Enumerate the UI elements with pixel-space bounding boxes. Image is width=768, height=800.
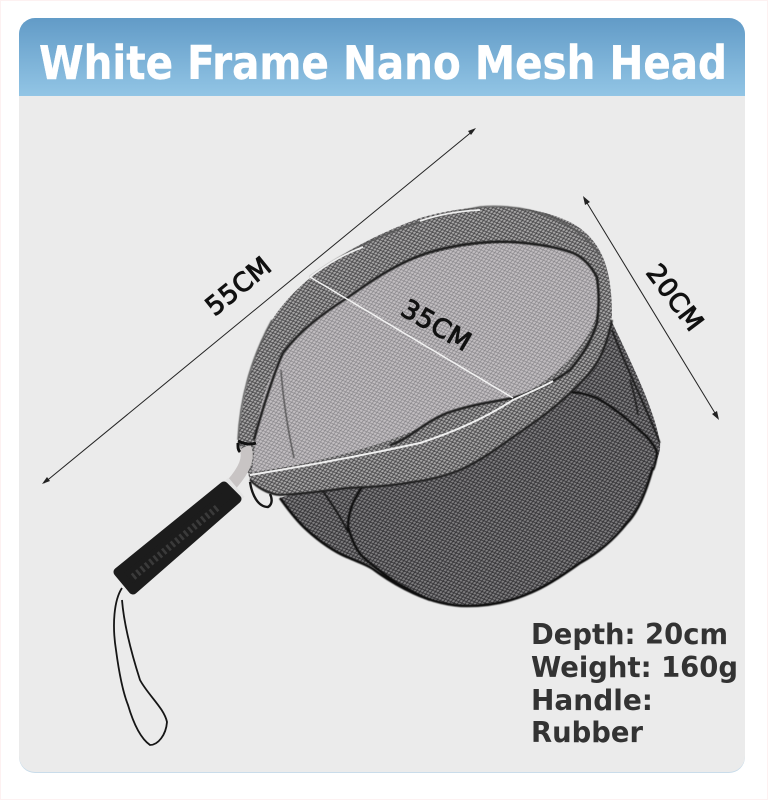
illustration: landing net [114,206,660,745]
label: 20cm: 20CM [640,259,709,338]
header band [19,18,745,96]
neck [232,447,247,484]
bag seams [280,330,660,606]
loop clip [250,482,272,507]
inner hoop opening [252,243,598,472]
specs text [531,617,738,749]
white frame highlights [250,381,553,475]
lanyard [114,588,167,745]
specs text: Handle: [531,683,653,717]
handle ring [227,479,243,498]
specs text: Rubber [531,715,644,749]
arrow: 55cm length [42,128,476,484]
rim band [238,207,612,495]
specs text: Depth: 20cm [531,617,728,651]
white 35cm line [310,277,513,398]
handle ribs [133,507,218,577]
arrow: 20cm depth [583,196,719,420]
label: 55cm: 55CM [200,251,278,322]
lower rim shadow [250,320,612,495]
label: 35cm: 35CM [396,294,476,358]
net bag [280,322,660,606]
handle [118,486,237,590]
hoop dark edge [238,206,612,495]
specs text: Weight: 160g [531,650,738,684]
